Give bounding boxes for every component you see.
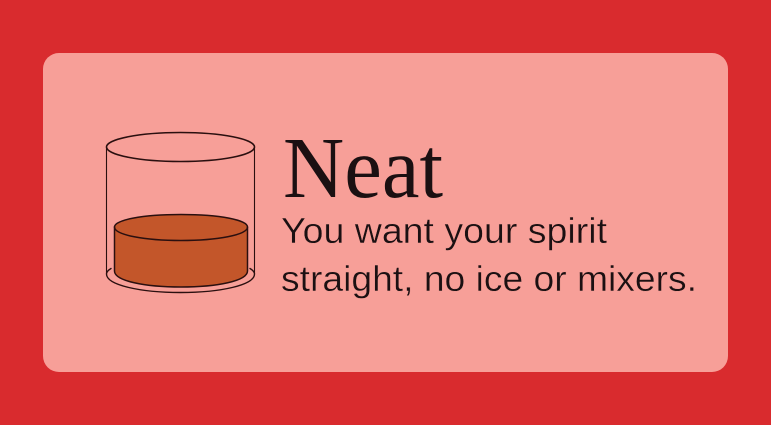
description text: You want your spirit	[281, 210, 607, 251]
description text	[281, 210, 697, 299]
description text: straight, no ice or mixers.	[281, 258, 697, 299]
panel: card	[43, 53, 728, 372]
title: Neat	[283, 119, 443, 216]
icon: glass of spirit	[106, 132, 254, 292]
